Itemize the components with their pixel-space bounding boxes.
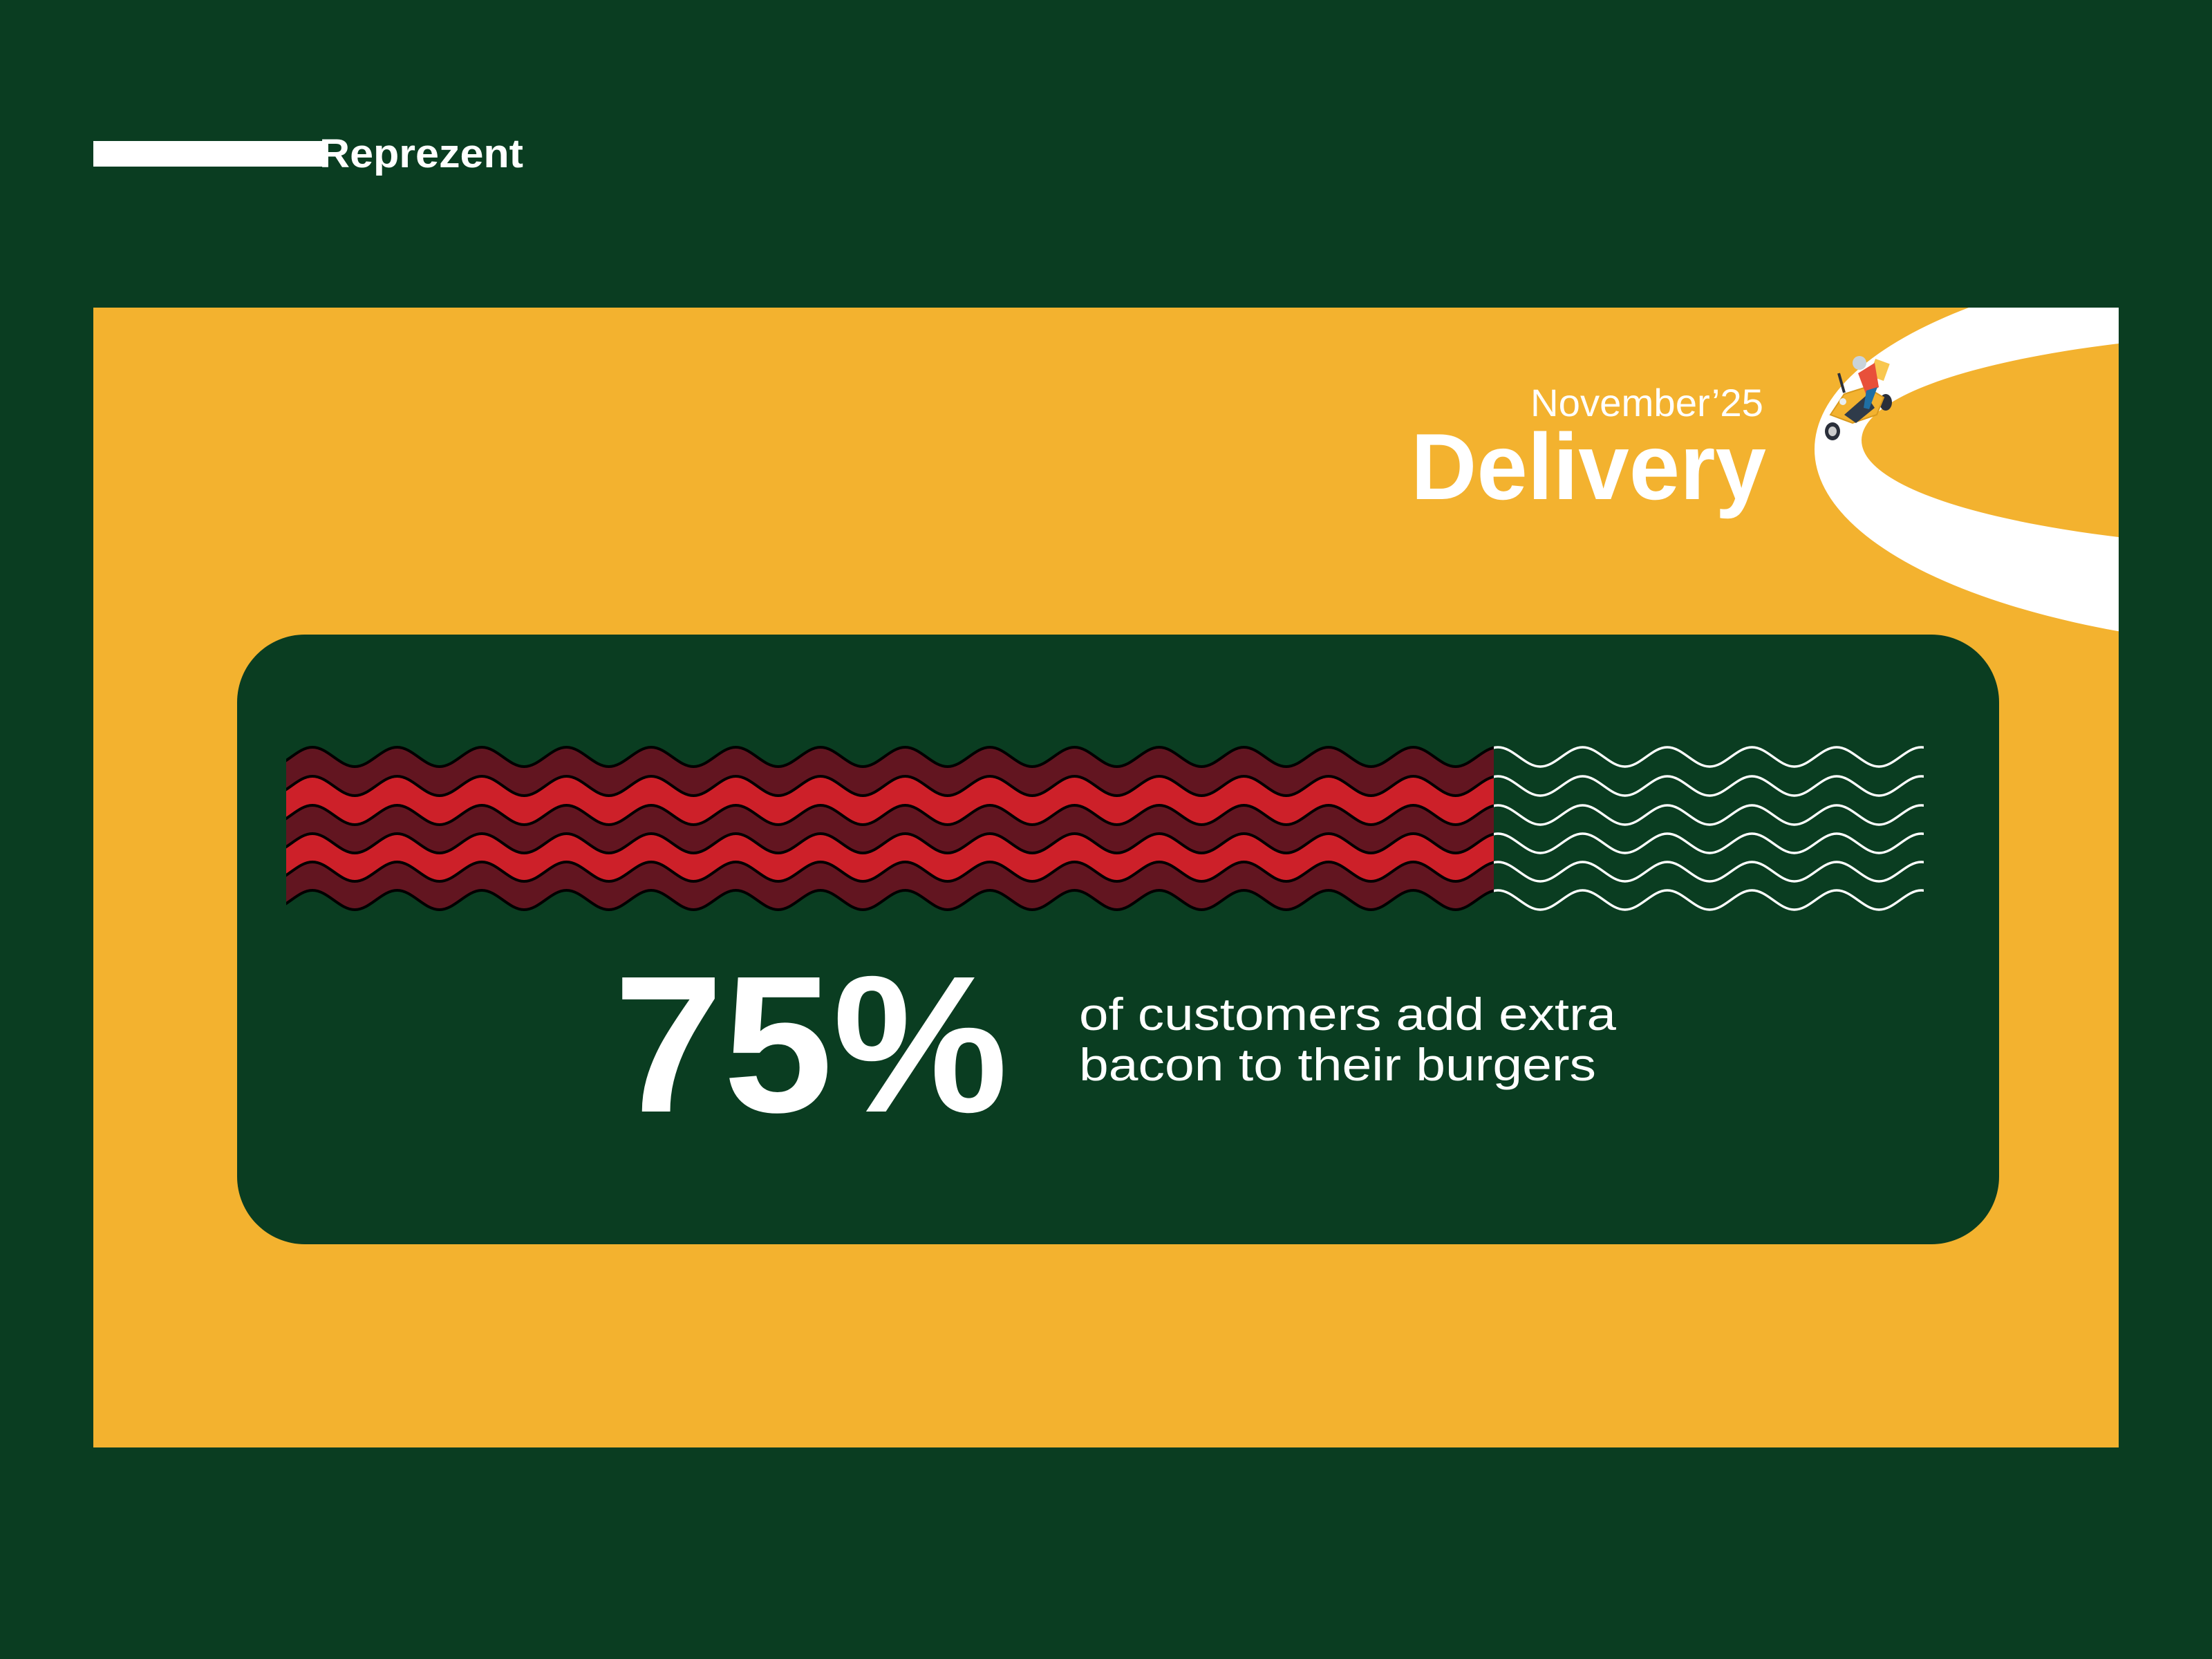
text block: description: of customers add extra (1079, 988, 1616, 1040)
heading: Delivery: Delivery (1411, 414, 1766, 519)
logo: Reprezent (93, 131, 523, 176)
big number: 75%: 75% (614, 935, 1008, 1153)
panel: stat card (237, 635, 1999, 1244)
chart: bacon strips (75%) (286, 740, 1924, 919)
panel: yellow background (93, 247, 2212, 1447)
text block: description: bacon to their burgers (1079, 1039, 1596, 1090)
text block: description (1079, 988, 1616, 1090)
logo: Reprezent: Reprezent (319, 131, 523, 176)
heading: November'25: November’25 (1530, 381, 1763, 424)
icon: delivery scooter (1825, 356, 1892, 440)
road ring (1815, 308, 2119, 632)
